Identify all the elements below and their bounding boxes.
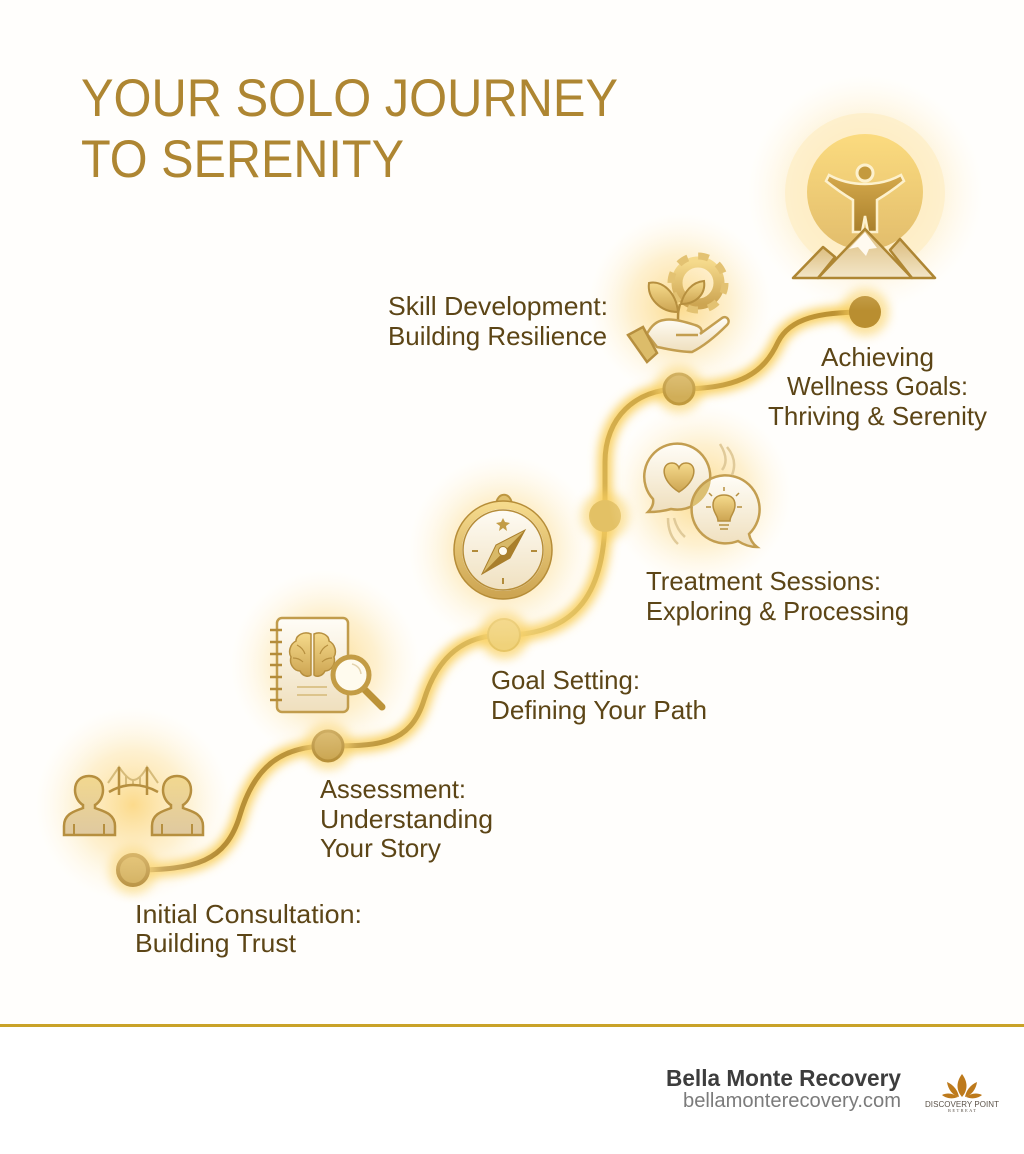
label: achieving wellness goals: Thriving & Serenity: [768, 401, 987, 431]
logo: discovery point retreat: [925, 1074, 999, 1113]
logo: discovery point retreat: DISCOVERY POINT: [925, 1100, 999, 1109]
label: goal setting: Defining Your Path: [491, 695, 707, 725]
node 6: [841, 288, 889, 336]
footer divider: [0, 1024, 1024, 1027]
label: initial consultation: [135, 899, 362, 958]
label: achieving wellness goals: Achieving: [821, 342, 934, 372]
icon: hand, plant and gear: [588, 213, 772, 397]
icon: chat bubbles: [615, 416, 779, 574]
node 5: [655, 365, 703, 413]
label: achieving wellness goals: Wellness Goals:: [787, 371, 968, 401]
icon: figure on mountain summit: [747, 75, 983, 311]
label: treatment sessions: Treatment Sessions:: [646, 566, 881, 596]
node 1: [109, 846, 157, 894]
footer brand text: Bella Monte Recovery: [666, 1065, 901, 1091]
icon: compass: [408, 455, 598, 645]
node 2: [304, 722, 352, 770]
footer panel: [0, 1027, 1024, 1154]
label: skill development: Skill Development:: [388, 291, 608, 321]
icon: two people and bridge: [35, 707, 231, 903]
title: TO SERENITY: [81, 130, 404, 189]
label: goal setting: Goal Setting:: [491, 665, 640, 695]
label: initial consultation: Building Trust: [135, 928, 297, 958]
title: YOUR SOLO JOURNEY: [81, 69, 618, 128]
label: skill development: Building Resilience: [388, 321, 607, 351]
node 3: [480, 611, 528, 659]
label: assessment: Your Story: [320, 833, 441, 863]
label: goal setting: [491, 665, 707, 725]
icon: notebook and magnifier: [230, 570, 420, 760]
label: assessment: Understanding: [320, 804, 493, 834]
node 4: [581, 492, 629, 540]
label: assessment: Assessment:: [320, 774, 466, 804]
footer brand text: [666, 1065, 901, 1112]
label: skill development: [388, 291, 608, 351]
title: [81, 69, 618, 189]
label: treatment sessions: [646, 566, 909, 626]
label: assessment: [320, 774, 493, 863]
label: initial consultation: Initial Consultation:: [135, 899, 362, 929]
label: achieving wellness goals: [768, 342, 987, 431]
footer brand text: bellamonterecovery.com: [683, 1090, 901, 1112]
journey path: [133, 312, 865, 870]
logo: discovery point retreat: RETREAT: [948, 1108, 976, 1113]
label: treatment sessions: Exploring & Processing: [646, 596, 909, 626]
